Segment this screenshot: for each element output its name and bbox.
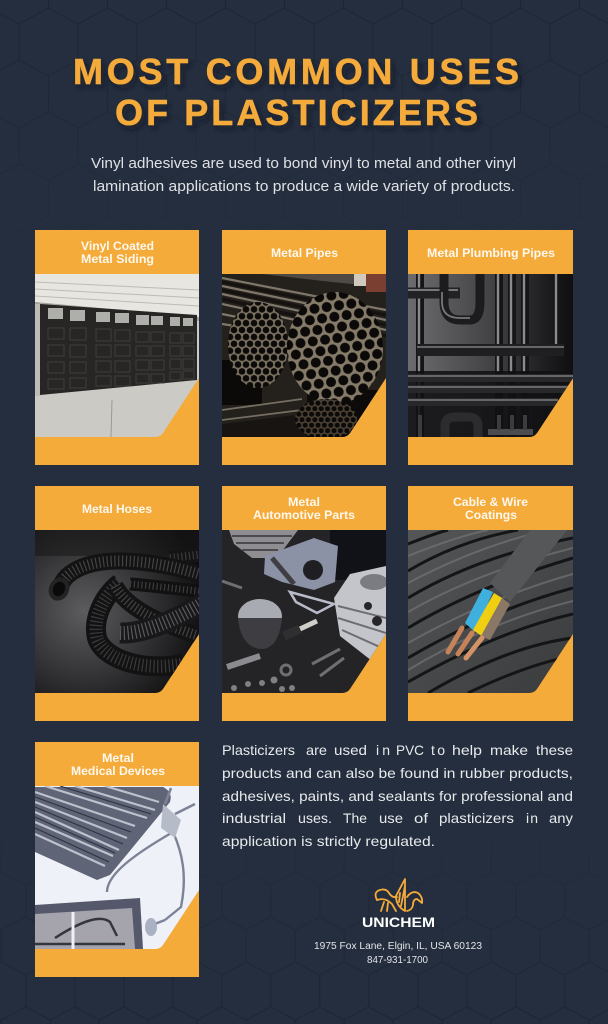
text block: plasticizers description: help <box>452 742 482 758</box>
heading: metal plumbing pipes: Metal Plumbing Pipes <box>427 248 555 260</box>
heading: cable and wire coatings <box>453 497 528 522</box>
text block: plasticizers description: used <box>334 742 367 758</box>
text block: plasticizers description <box>222 742 573 849</box>
heading: metal hoses: Metal Hoses <box>82 504 152 516</box>
text block: plasticizers description: application is strictly regulated. <box>222 833 435 849</box>
piston <box>238 599 282 618</box>
photo: garage door <box>35 274 199 437</box>
intro text <box>91 155 516 195</box>
cable <box>490 530 567 602</box>
panel: metal plumbing pipes <box>408 230 573 465</box>
text block: plasticizers description: PVC <box>396 742 424 758</box>
heading: cable and wire coatings: Coatings <box>465 510 517 522</box>
text block: plasticizers description: in <box>376 742 390 758</box>
engine cylinder top <box>229 530 298 558</box>
text block: plasticizers description: uses. <box>298 810 332 826</box>
text block: plasticizers description: are <box>306 742 327 758</box>
text block: plasticizers description: use <box>379 810 403 826</box>
heading: metal medical devices: Medical Devices <box>71 766 165 778</box>
heading: metal automotive parts: Automotive Parts <box>253 510 355 522</box>
text block: plasticizers description: of <box>414 810 428 826</box>
carburetor <box>264 538 338 590</box>
hose strands <box>60 554 205 666</box>
contact details <box>314 941 482 966</box>
heading: vinyl coated metal siding <box>81 241 154 266</box>
instrument tray <box>35 787 171 880</box>
contact details: 1975 Fox Lane, Elgin, IL, USA 60123 <box>314 941 482 952</box>
heading: metal medical devices: Metal <box>102 753 134 765</box>
small parts <box>222 581 344 676</box>
intro text: Vinyl adhesives are used to bond vinyl to metal and other vinyl <box>91 155 516 172</box>
panel: metal automotive parts <box>222 486 388 721</box>
panel: cable and wire coatings <box>408 486 573 721</box>
text block: plasticizers description: The <box>343 810 367 826</box>
text block: plasticizers description: any <box>549 810 573 826</box>
heading: cable and wire coatings: Cable & Wire <box>453 497 528 509</box>
panel: vinyl coated metal siding <box>35 230 199 465</box>
spark plug <box>300 621 317 629</box>
title <box>73 51 519 133</box>
heading: metal medical devices <box>71 753 165 778</box>
photo: black plumbing pipes <box>408 274 573 437</box>
pliers <box>107 832 184 927</box>
heading: metal automotive parts <box>253 497 355 522</box>
contact details: 847-931-1700 <box>367 955 428 966</box>
door windows <box>48 308 193 326</box>
text block: plasticizers description: Plasticizers <box>222 742 295 758</box>
photo: surgical instruments <box>35 786 199 949</box>
title: MOST COMMON USES <box>73 51 519 92</box>
photo: engine parts <box>222 530 388 693</box>
text block: plasticizers description: products and can also be found in rubber products, <box>222 765 573 781</box>
text block: plasticizers description: to <box>431 742 445 758</box>
photo: corrugated hoses <box>35 530 205 693</box>
intro text: lamination applications to produce a wide variety of products. <box>93 178 515 195</box>
text block: plasticizers description: make <box>490 742 528 758</box>
text block: plasticizers description: industrial <box>222 810 286 826</box>
heading: vinyl coated metal siding: Vinyl Coated <box>81 241 154 253</box>
photo: cable cross-section <box>408 530 573 693</box>
heading: metal automotive parts: Metal <box>288 497 320 509</box>
logo wordmark: UNICHEM <box>362 914 435 930</box>
text block: plasticizers description: adhesives, paints, and sealants for professional and <box>222 788 573 804</box>
title: OF PLASTICIZERS <box>115 92 478 133</box>
heading: metal pipes: Metal Pipes <box>271 248 338 260</box>
lower tray <box>35 898 143 949</box>
panel: metal hoses <box>35 486 205 721</box>
text block: plasticizers description: these <box>536 742 573 758</box>
text block: plasticizers description: plasticizers <box>439 810 514 826</box>
text block: plasticizers description: in <box>526 810 538 826</box>
right cylinder <box>334 566 386 661</box>
logo: unichem griffin <box>376 879 422 911</box>
heading: vinyl coated metal siding: Metal Siding <box>81 254 154 266</box>
photo: stacked metal pipes <box>222 274 386 439</box>
panel: metal medical devices <box>35 742 199 977</box>
panel: metal pipes <box>222 230 386 465</box>
